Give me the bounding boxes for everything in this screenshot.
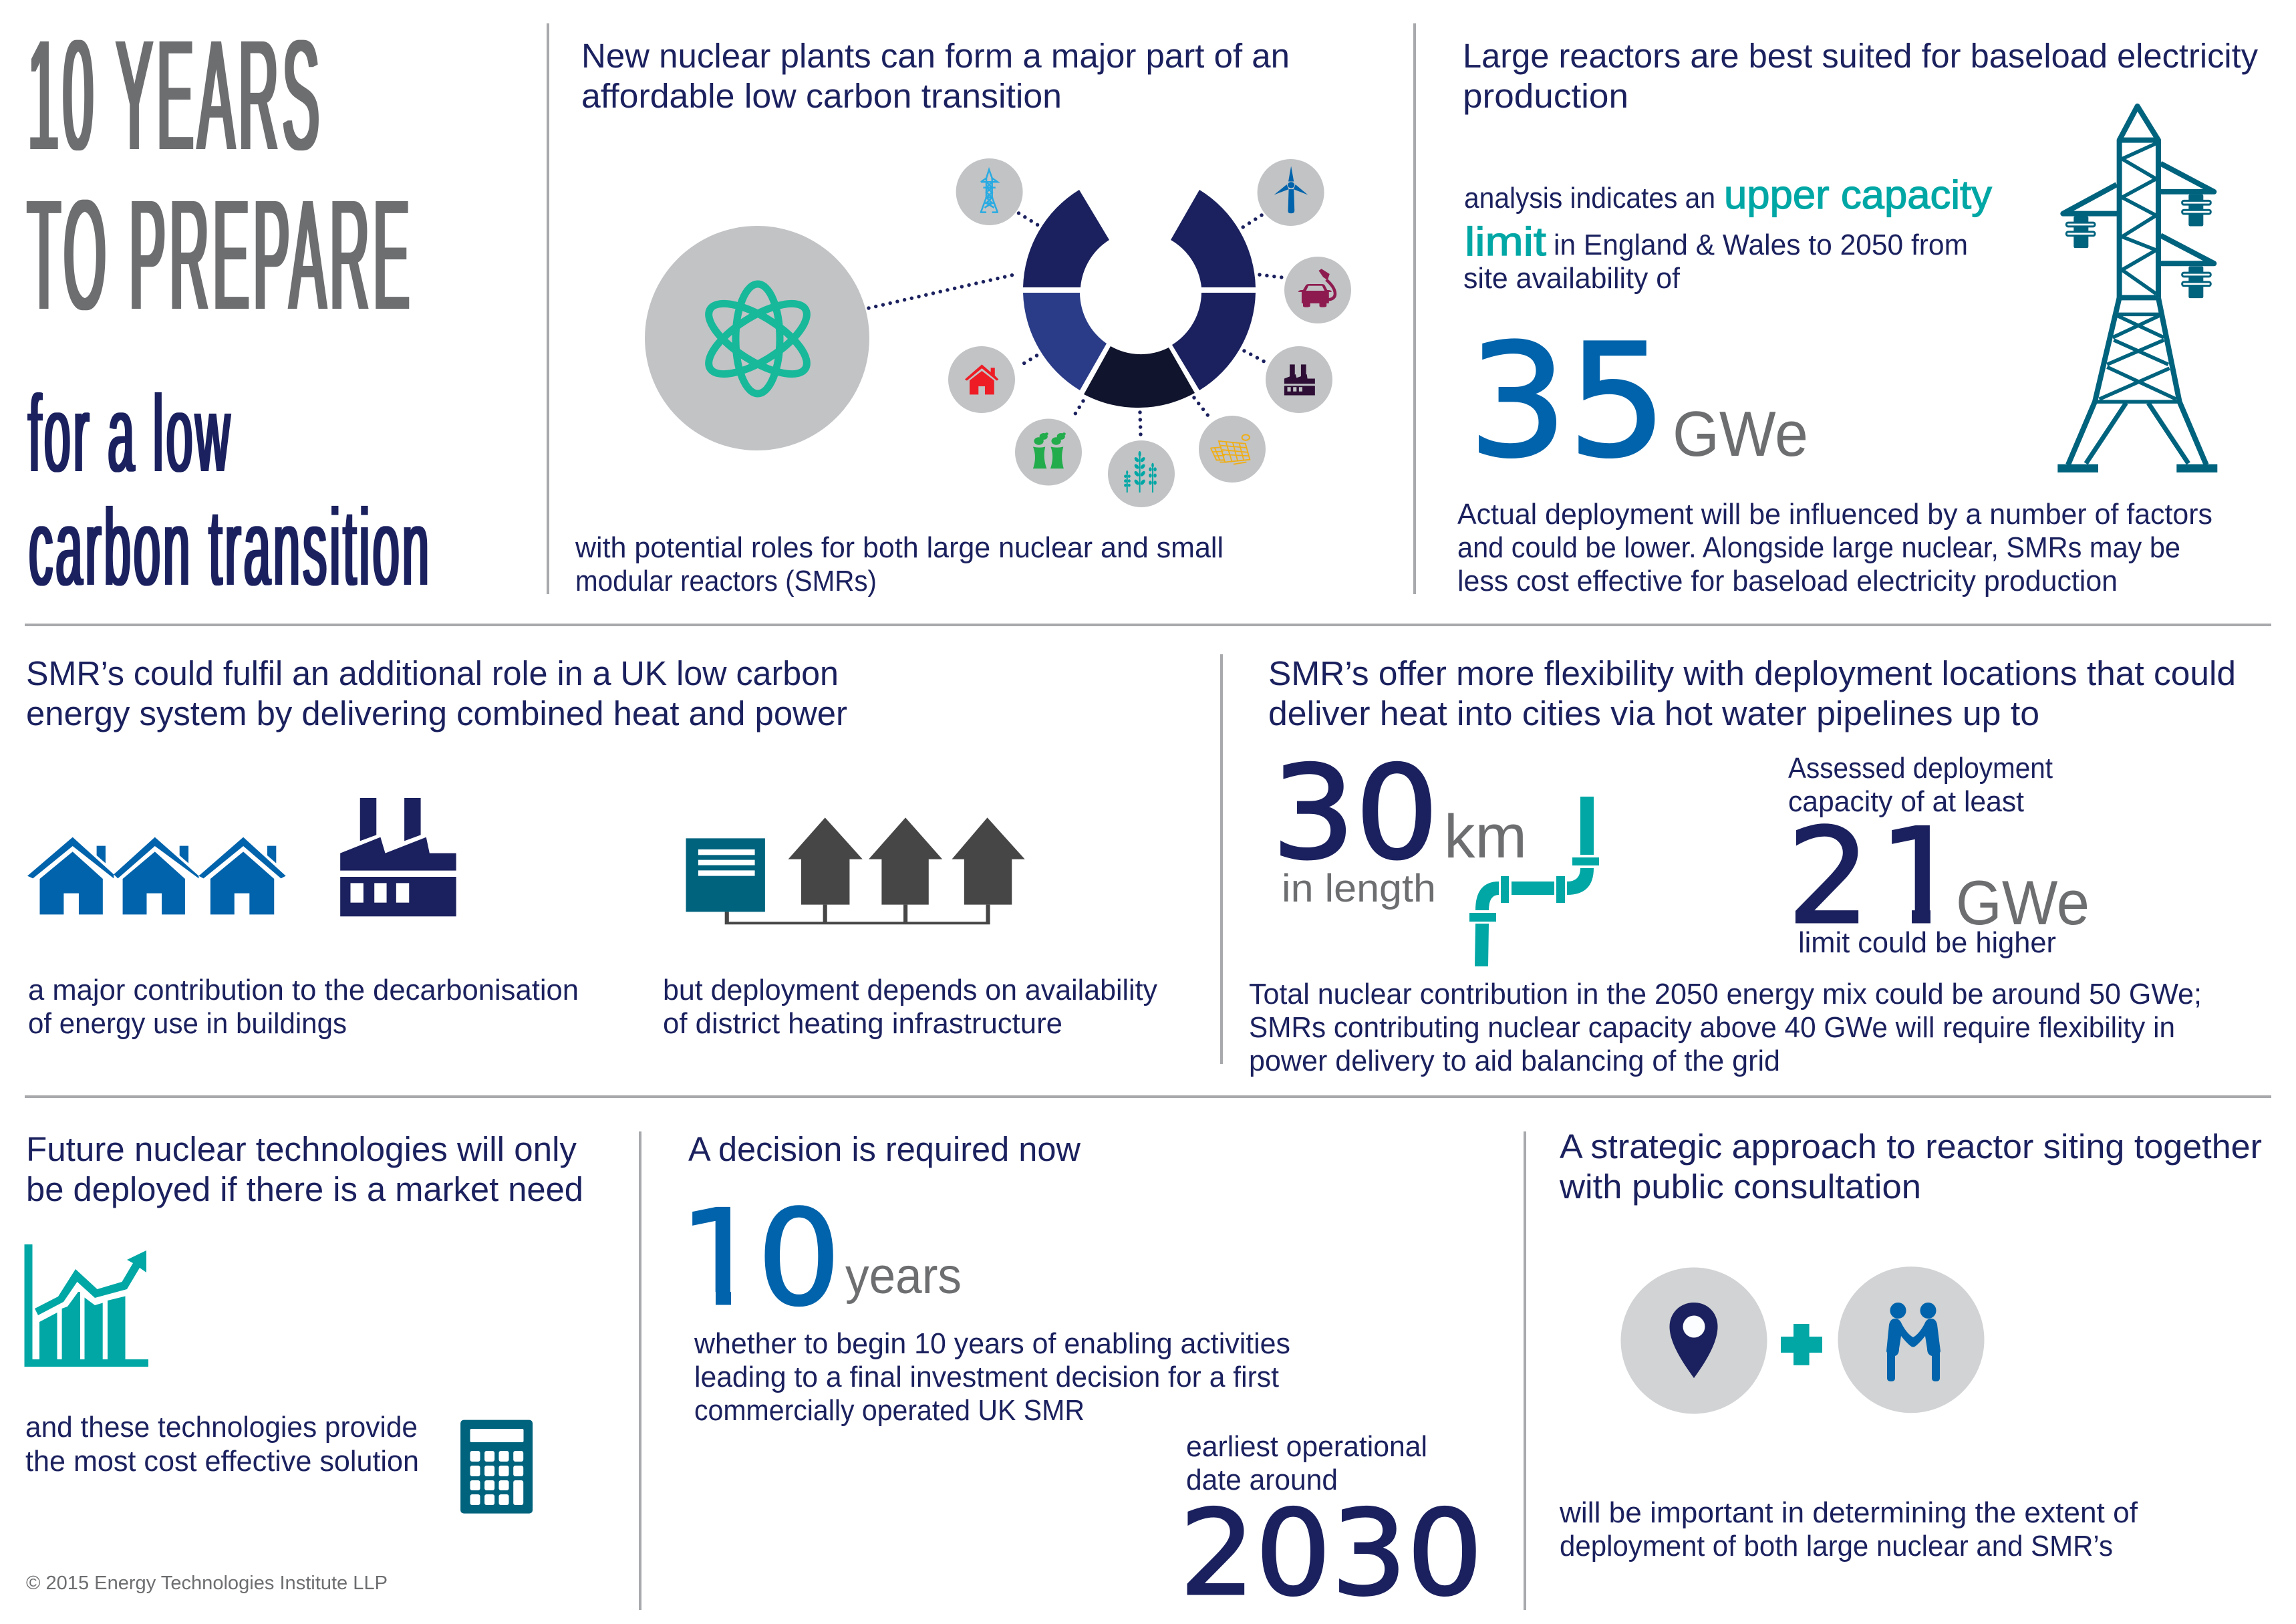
text: cost effective: the most cost effective solution — [25, 1445, 419, 1478]
panel: decision required — [679, 1130, 1483, 1622]
icon: cooling towers — [1015, 418, 1082, 485]
icon: wheat — [1108, 440, 1175, 507]
stat: 10 years — [679, 1182, 962, 1335]
text: total nuclear contribution: Total nuclear contribution in the 2050 energy mix could be around 50 GWe; — [1249, 978, 2202, 1010]
stat: 10 years: 10 — [679, 1182, 841, 1335]
text: potential roles — [575, 531, 1224, 597]
stat: 21 GWe — [1787, 801, 2090, 954]
panel: nuclear in low carbon transition — [575, 37, 1351, 597]
icon: atom — [645, 226, 869, 450]
icon: solar panels — [1199, 416, 1266, 483]
text: earliest operational date: earliest operational — [1186, 1430, 1427, 1463]
icon: rising chart — [24, 1244, 148, 1367]
text: total nuclear contribution — [1249, 978, 2202, 1077]
text: enabling activities: commercially operated UK SMR — [694, 1394, 1085, 1427]
heading: affordable low carbon transition — [581, 77, 1062, 115]
heading: SMR’s could fulfil an additional role in a UK low carbon — [26, 654, 839, 692]
title — [27, 7, 432, 608]
heading: SMR’s offer more flexibility with deployment locations that could — [1268, 654, 2236, 692]
text: capacity limit — [1463, 172, 1992, 295]
icon: pipe — [1469, 797, 1599, 966]
text: actual deployment: less cost effective for baseload electricity production — [1457, 565, 2118, 597]
icon: plus — [1781, 1324, 1822, 1365]
heading: A strategic approach to reactor siting together — [1560, 1127, 2262, 1166]
stat: 21 GWe: 21 — [1787, 801, 1962, 954]
stat: 30 km — [1272, 739, 1527, 910]
text: limit could be higher: limit could be higher — [1798, 926, 2056, 959]
heading: production — [1463, 77, 1628, 115]
heading — [26, 654, 847, 732]
icon: three houses — [27, 837, 286, 914]
text: enabling activities: whether to begin 10 years of enabling activities — [694, 1327, 1290, 1360]
stat: 35 GWe — [1468, 311, 1808, 492]
text: assessed capacity — [1788, 752, 2053, 818]
heading: A decision is required now — [688, 1130, 1081, 1168]
panel: strategic siting — [1559, 1127, 2262, 1563]
donut chart — [1023, 190, 1256, 408]
text: assessed capacity: capacity of at least — [1788, 785, 2024, 818]
text: total nuclear contribution: power delivery to aid balancing of the grid — [1249, 1045, 1780, 1077]
panel: large reactors — [1457, 37, 2258, 597]
stat: 21 GWe: GWe — [1956, 867, 2090, 938]
icon: pylon — [956, 158, 1023, 225]
text: carbon transition — [29, 486, 432, 608]
text: capacity limit: in England & Wales to 2050 from — [1554, 229, 1968, 261]
icon: factory — [1266, 346, 1332, 413]
stat: 2030: 2030 — [1179, 1485, 1483, 1622]
stat: 30 km: 30 — [1272, 739, 1439, 888]
heading — [1463, 37, 2258, 115]
icon: factory large — [340, 798, 456, 916]
icon: house — [948, 346, 1015, 413]
text: capacity limit: analysis indicates an — [1464, 182, 1715, 215]
text: importance of siting — [1559, 1496, 2138, 1563]
stat: 35 GWe: GWe — [1673, 398, 1808, 470]
text: potential roles: with potential roles for both large nuclear and small — [575, 531, 1224, 564]
panel: deployment flexibility — [1249, 654, 2236, 1077]
text: capacity limit: limit — [1465, 219, 1546, 264]
text: decarbonisation — [28, 974, 579, 1040]
copyright: © 2015 Energy Technologies Institute LLP — [26, 1573, 388, 1594]
icon: calculator — [460, 1420, 533, 1514]
heading: Large reactors are best suited for baseload electricity — [1463, 37, 2258, 75]
text: importance of siting: deployment of both large nuclear and SMR’s — [1560, 1530, 2113, 1563]
text: district heating: but deployment depends on availability — [663, 974, 1157, 1006]
title: for a low — [28, 372, 233, 495]
heading: energy system by delivering combined heat and power — [26, 694, 847, 732]
heading: Future nuclear technologies will only — [26, 1130, 577, 1168]
text: district heating: of district heating infrastructure — [663, 1007, 1062, 1040]
heading — [1559, 1127, 2262, 1206]
heading: be deployed if there is a market need — [26, 1170, 583, 1208]
text: earliest operational date — [1186, 1430, 1427, 1496]
stat: 30 km: in length — [1282, 867, 1436, 910]
text: importance of siting: will be important in determining the extent of — [1559, 1496, 2138, 1529]
text: actual deployment: Actual deployment will be influenced by a number of factors — [1457, 498, 2212, 531]
icon: wind turbine — [1258, 159, 1324, 226]
text: assessed capacity: Assessed deployment — [1788, 752, 2053, 785]
text: potential roles: modular reactors (SMRs) — [575, 565, 877, 597]
icon: transmission tower — [2057, 106, 2217, 472]
icon: electric car — [1284, 257, 1351, 323]
text: earliest operational date: date around — [1186, 1464, 1338, 1496]
panel: market need — [24, 1130, 583, 1594]
text: total nuclear contribution: SMRs contributing nuclear capacity above 40 GWe will require flexibility in — [1249, 1011, 2175, 1044]
text: cost effective — [25, 1411, 419, 1478]
text: capacity limit: upper capacity — [1724, 172, 1992, 217]
icon: location pin — [1621, 1267, 1767, 1414]
text: 10 YEARS — [28, 7, 323, 182]
text: decarbonisation: a major contribution to the decarbonisation — [28, 974, 579, 1006]
stat: 35 GWe: 35 — [1468, 311, 1667, 492]
text: district heating — [663, 974, 1157, 1040]
panel: combined heat and power — [26, 654, 1157, 1040]
text: enabling activities — [694, 1327, 1290, 1427]
text: capacity limit: site availability of — [1463, 262, 1681, 295]
stat: 30 km: km — [1444, 803, 1527, 871]
text: TO PREPARE — [27, 167, 414, 342]
heading — [1268, 654, 2236, 732]
heading — [26, 1130, 583, 1208]
heading: New nuclear plants can form a major part of an — [581, 37, 1290, 75]
text: cost effective: and these technologies provide — [25, 1411, 418, 1444]
text: actual deployment — [1457, 498, 2212, 597]
text: actual deployment: and could be lower. Alongside large nuclear, SMRs may be — [1457, 531, 2180, 564]
heading — [581, 37, 1290, 115]
heading: with public consultation — [1559, 1168, 1921, 1206]
text: decarbonisation: of energy use in buildings — [28, 1007, 347, 1040]
text: enabling activities: leading to a final investment decision for a first — [694, 1361, 1279, 1393]
dotted connectors — [869, 213, 1282, 435]
heading: deliver heat into cities via hot water pipelines up to — [1268, 694, 2039, 732]
icon: district heating network — [686, 817, 1025, 924]
icon: people holding hands — [1838, 1266, 1985, 1413]
stat: 10 years: years — [845, 1248, 962, 1305]
